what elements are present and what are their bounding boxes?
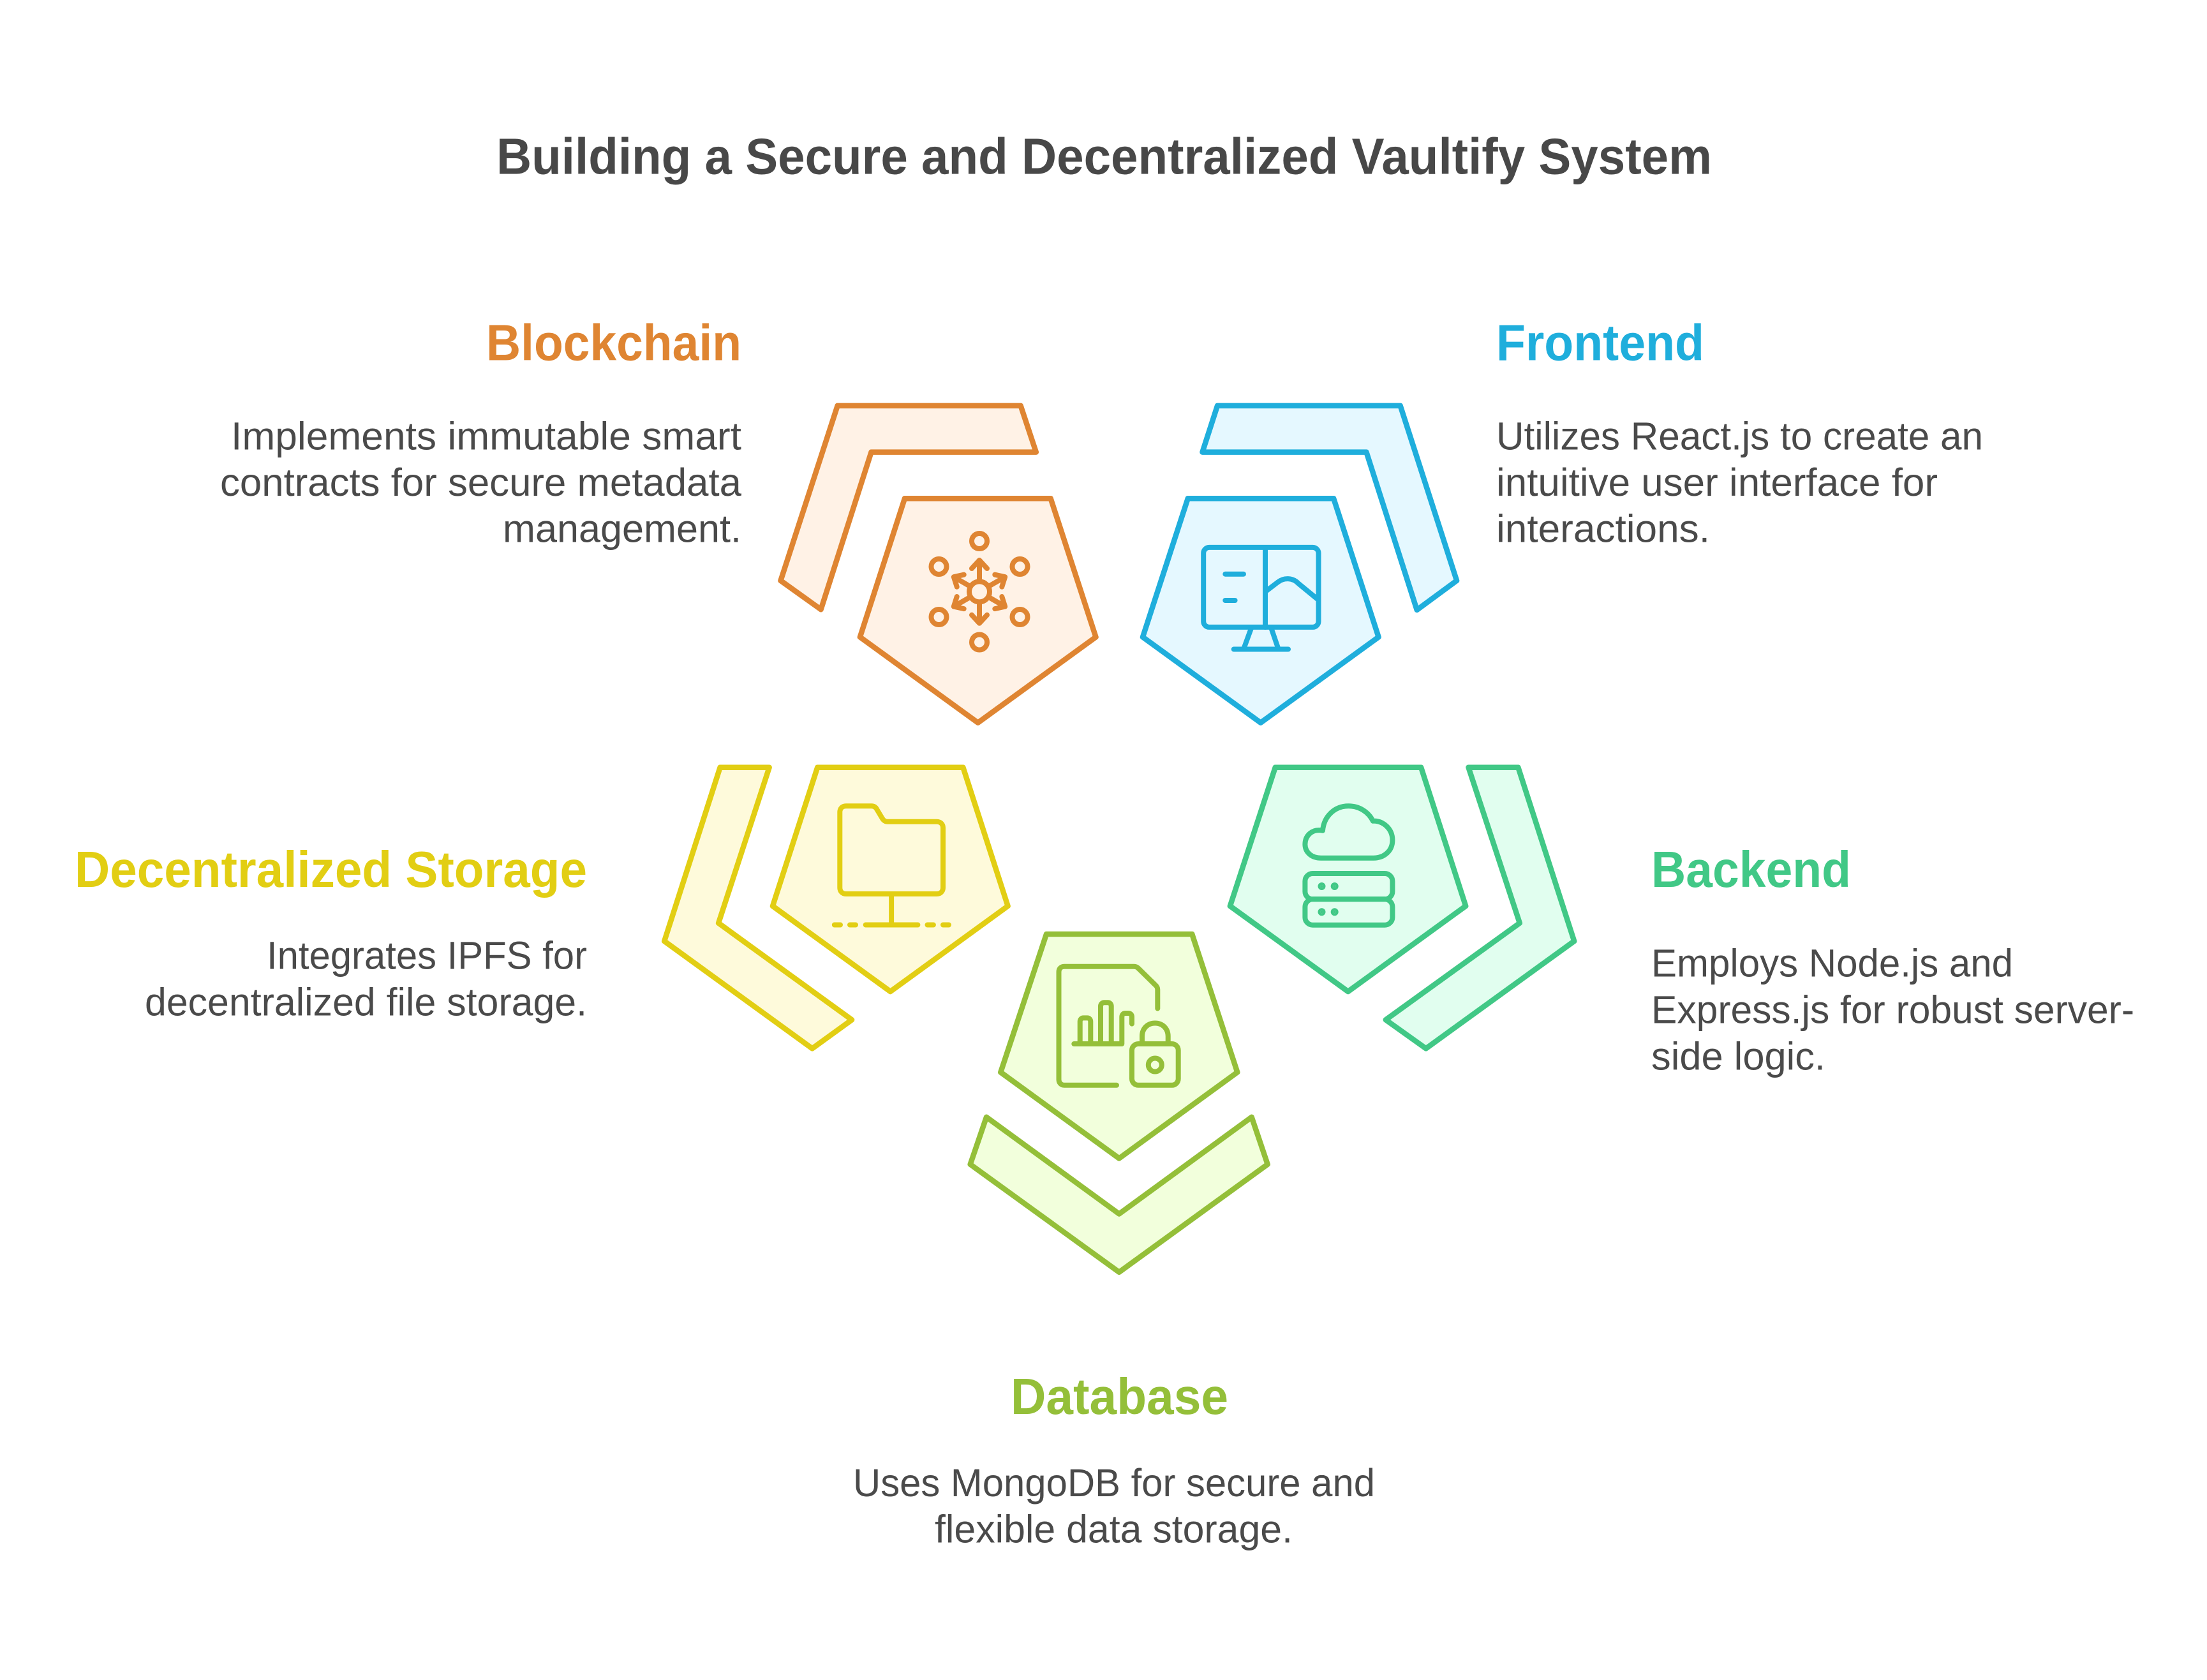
text: blockchain description: management.	[503, 507, 741, 551]
panel: backend	[1230, 768, 2134, 1078]
text: database description	[853, 1461, 1375, 1550]
heading: decentralized storage: Decentralized Storage	[75, 841, 587, 898]
panel: blockchain	[220, 314, 1096, 723]
text: decentralized storage description	[145, 933, 587, 1023]
text: decentralized storage description: decentralized file storage.	[145, 980, 587, 1023]
band: decentralized storage outer bracket	[664, 768, 852, 1048]
pentagon: blockchain	[860, 498, 1096, 723]
text: decentralized storage description: Integrates IPFS for	[267, 933, 587, 977]
pentagon: database	[1000, 934, 1237, 1159]
heading: blockchain: Blockchain	[486, 314, 741, 371]
text: backend description	[1651, 942, 2134, 1078]
pentagon: frontend	[1143, 498, 1379, 723]
text: frontend description: intuitive user interface for	[1496, 461, 1938, 504]
panel: decentralized storage	[75, 768, 1008, 1048]
text: blockchain description: Implements immutable smart	[231, 415, 741, 458]
band: blockchain outer bracket	[781, 406, 1036, 609]
pentagon: decentralized storage	[773, 768, 1008, 992]
band: backend outer bracket	[1386, 768, 1574, 1048]
text: backend description: side logic.	[1651, 1035, 1825, 1078]
heading: backend: Backend	[1651, 841, 1851, 898]
text: backend description: Express.js for robust server-	[1651, 988, 2134, 1031]
text: frontend description: Utilizes React.js to create an	[1496, 415, 1983, 458]
text: blockchain description: contracts for secure metadata	[220, 461, 741, 504]
icon: cloud and servers	[1305, 806, 1392, 925]
text: blockchain description	[220, 415, 741, 551]
panel: database	[853, 934, 1375, 1550]
heading: frontend: Frontend	[1496, 314, 1704, 371]
text: database description: flexible data storage.	[935, 1507, 1293, 1550]
text: frontend description: interactions.	[1496, 507, 1710, 551]
band: database outer chevron	[970, 1117, 1268, 1272]
icon: network hub with arrows	[932, 533, 1027, 650]
icon: network folder	[835, 806, 949, 925]
panel: frontend	[1143, 314, 1983, 723]
heading: database: Database	[1011, 1368, 1228, 1425]
title: Building a Secure and Decentralized Vaultify System	[496, 128, 1712, 185]
text: backend description: Employs Node.js and	[1651, 942, 2013, 985]
band: frontend outer bracket	[1202, 406, 1457, 610]
icon: secured data file	[1059, 967, 1178, 1085]
text: frontend description	[1496, 415, 1983, 551]
pentagon: backend	[1230, 768, 1466, 992]
text: database description: Uses MongoDB for secure and	[853, 1461, 1375, 1505]
icon: monitor with chart	[1203, 547, 1318, 650]
